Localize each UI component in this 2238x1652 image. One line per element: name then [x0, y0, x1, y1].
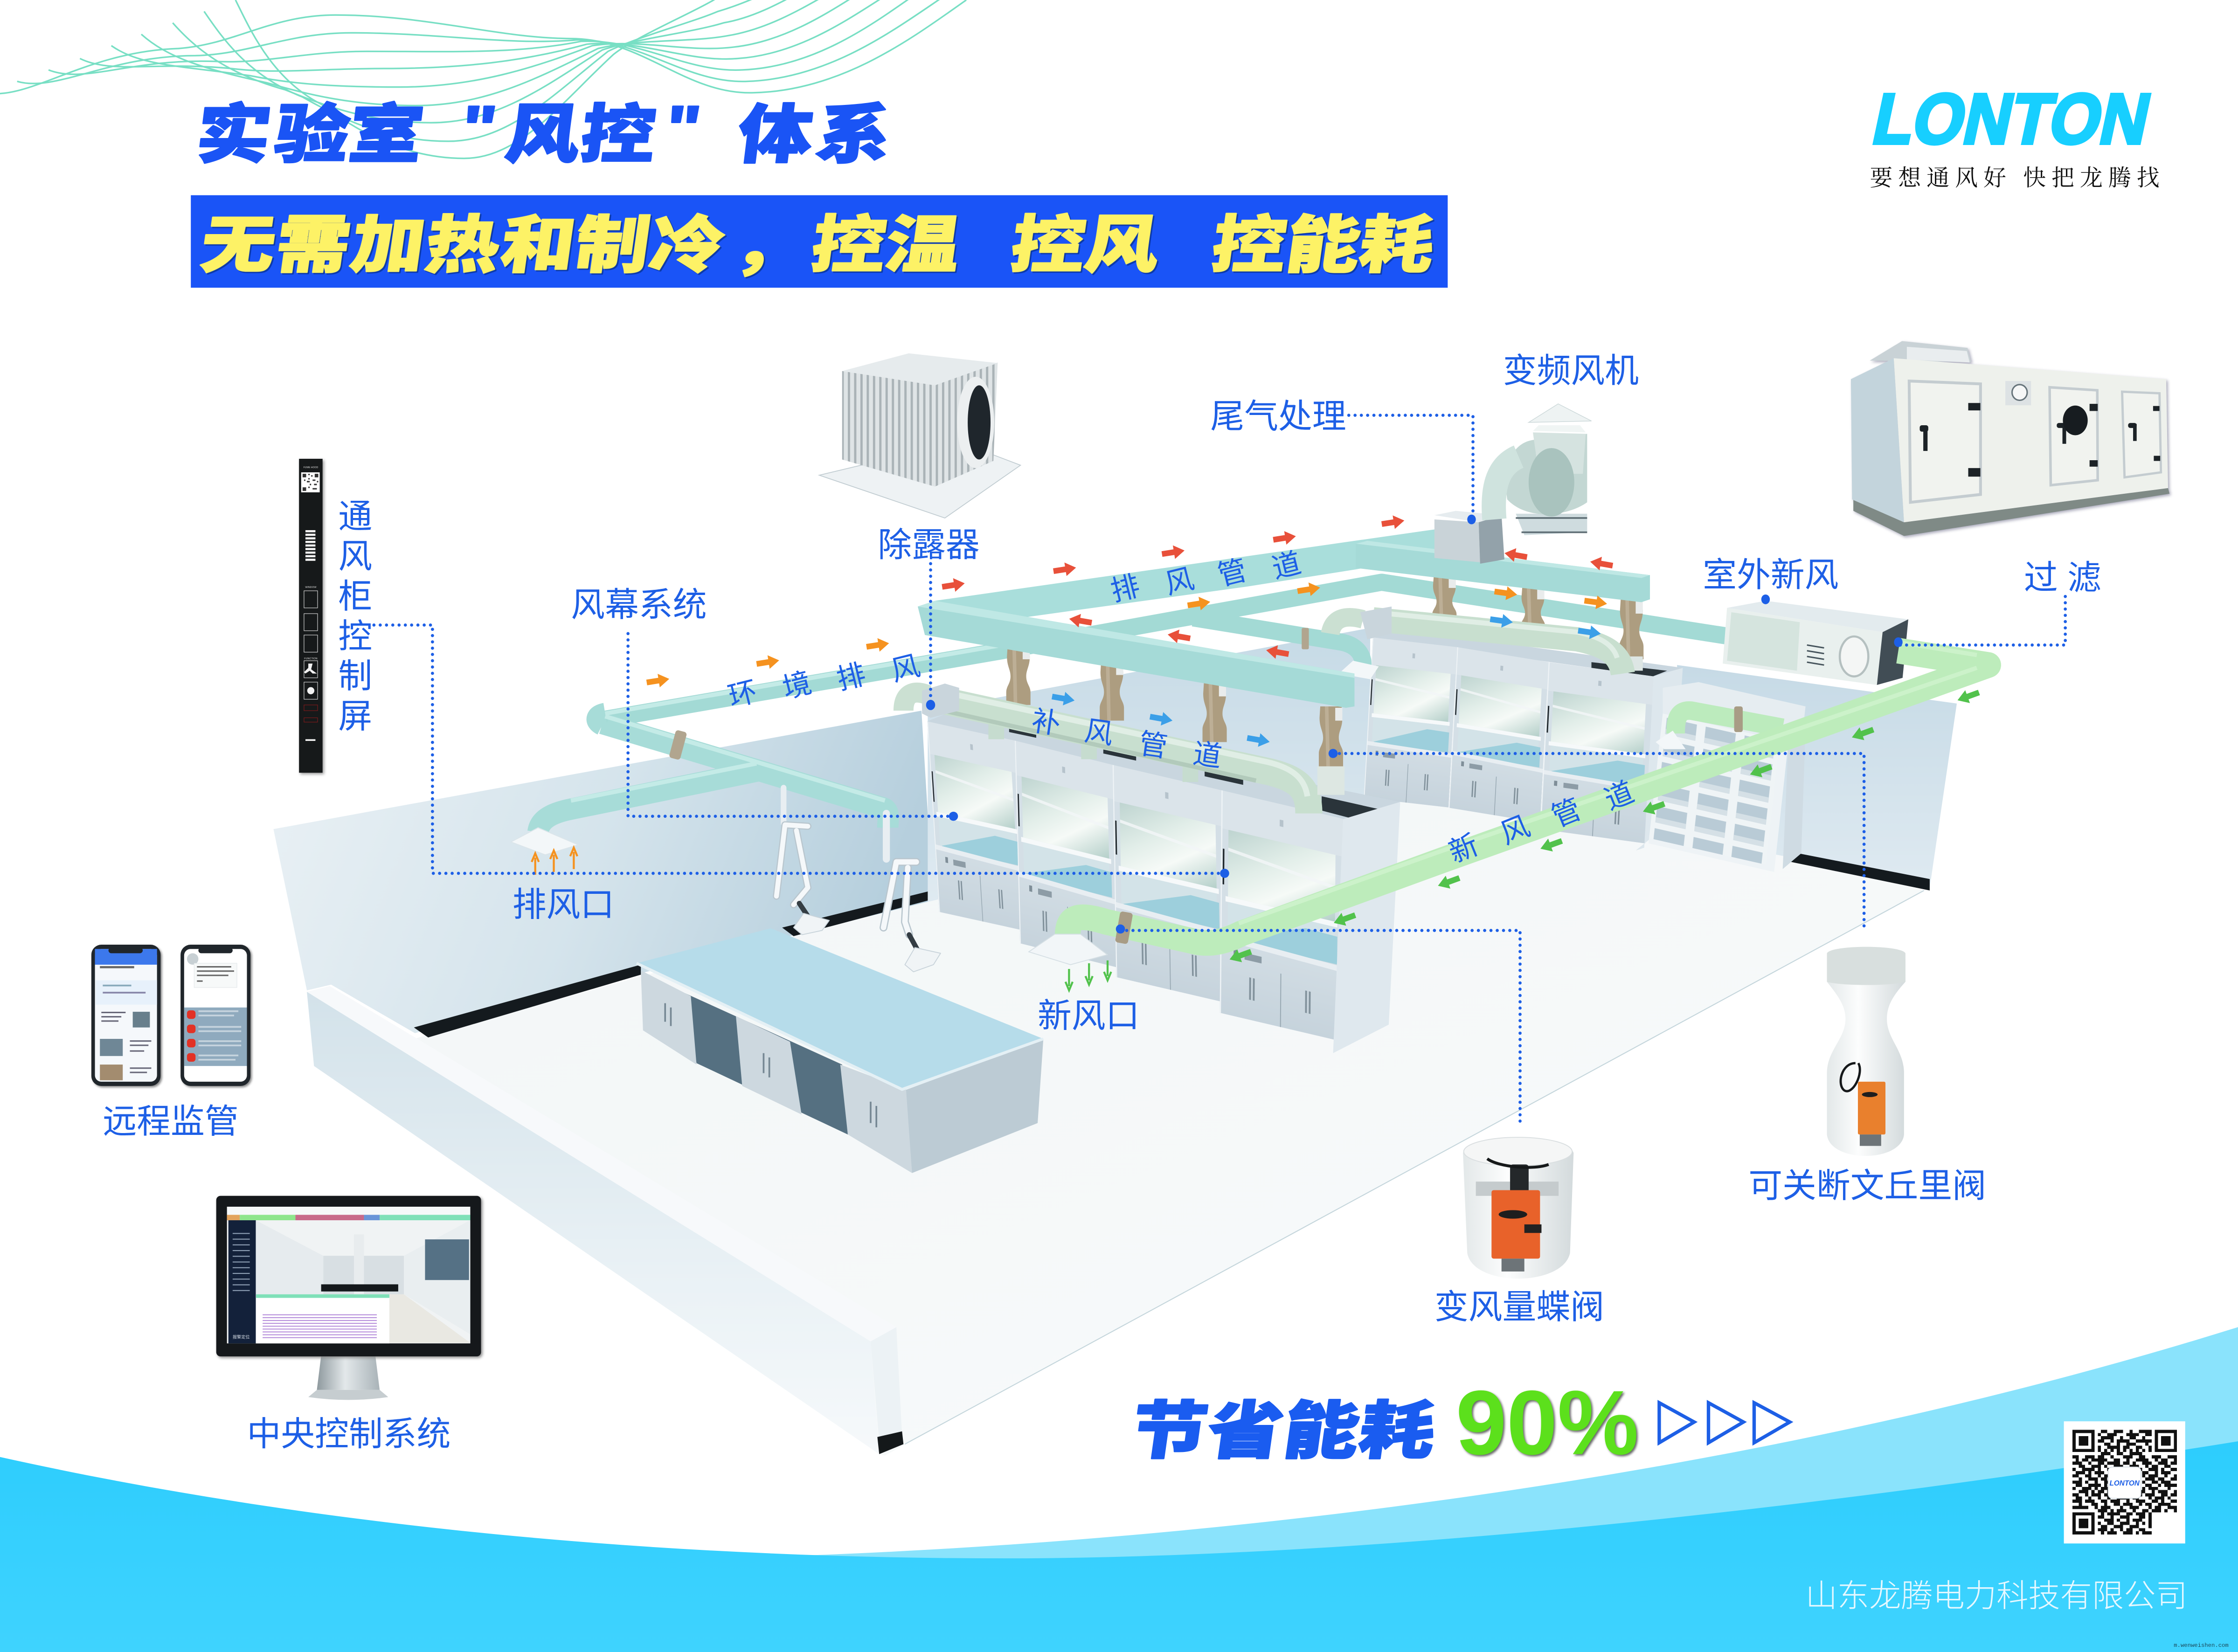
pipe labels — [725, 547, 1638, 869]
label: supply air duct: 管 — [1137, 727, 1170, 763]
triple arrows — [1659, 1403, 1790, 1443]
arm 2 — [884, 862, 916, 935]
unit louver panel — [1727, 612, 1800, 670]
valve cylinder — [1463, 1137, 1573, 1279]
title: 实验室"风控"体系 — [193, 93, 896, 171]
bottom blue wave background — [0, 1327, 2238, 1652]
QR dark dots — [303, 474, 319, 491]
label: fresh air duct: 道 — [1600, 776, 1638, 816]
right beam duct — [1356, 541, 1650, 602]
lab room scene — [273, 628, 1957, 1456]
AHU fan window — [2063, 406, 2088, 435]
central control monitor — [216, 1196, 481, 1400]
label: fresh air duct: 风 — [1496, 810, 1534, 850]
panel caption: FUME HOOD — [304, 466, 319, 469]
label: environment exhaust — [725, 650, 923, 713]
QR background — [2064, 1421, 2185, 1543]
label: environment exhaust: 风 — [888, 650, 923, 687]
phone 1 — [91, 945, 160, 1086]
subtitle banner — [191, 195, 1448, 288]
AHU right door — [2122, 392, 2161, 477]
slogan text: 节省能耗 — [1127, 1396, 1440, 1466]
fresh air duct — [1067, 642, 1988, 944]
decorative wave lines — [0, 0, 966, 159]
screen info overlay — [425, 1239, 469, 1280]
label: fresh air duct — [1444, 776, 1638, 869]
fan stand — [1516, 514, 1587, 535]
left hood side panel — [1333, 802, 1400, 1053]
duct left stub — [903, 692, 928, 711]
label: tail gas: 尾气处理 — [1210, 398, 1346, 435]
label: butterfly valve: 变风量蝶阀 — [1434, 1288, 1604, 1326]
label: fresh air duct: 新 — [1444, 829, 1483, 869]
pipe branches to exhaust vents — [538, 713, 888, 832]
label: air curtain: 风幕系统 — [571, 586, 707, 624]
banner background — [191, 195, 1448, 288]
label: fume hood control screen: 通 — [338, 498, 372, 535]
bench handles — [665, 1003, 876, 1127]
left supply air duct — [903, 692, 1309, 813]
company name: 山东龙腾电力科技有限公司 — [1806, 1578, 2188, 1614]
bench top edge — [637, 963, 1043, 1089]
monitor bezel — [216, 1196, 481, 1356]
AHU base — [1853, 488, 2169, 536]
cabinet top cap — [1663, 682, 1806, 748]
duct stubs into hoods — [996, 713, 1191, 782]
AHU middle door — [2050, 387, 2098, 485]
fan scroll face — [1529, 448, 1574, 517]
right supply air duct — [1330, 612, 1623, 674]
exhaust duct network — [918, 529, 1650, 708]
demister round port — [957, 377, 994, 468]
floor — [343, 794, 1924, 1456]
left hood units — [927, 721, 1027, 931]
unit vent slits — [1807, 645, 1824, 665]
fresh air vent — [1029, 934, 1107, 965]
label: exhaust vent: 排风口 — [513, 886, 614, 924]
orange environment arrows — [645, 581, 1608, 689]
actuator tab — [1524, 1224, 1541, 1233]
green down arrows — [1066, 961, 1111, 990]
unit top — [1727, 601, 1908, 632]
label: supply air duct: 补 — [1030, 705, 1062, 740]
fan and light icons — [304, 664, 317, 741]
left back wall — [273, 711, 933, 1033]
phone 2 — [180, 945, 250, 1086]
label: fume hood control screen: 制 — [338, 657, 372, 695]
environment exhaust pipe — [538, 582, 1730, 832]
screen lab view — [256, 1220, 470, 1343]
AHU left door — [1909, 381, 1981, 502]
arm 2 head — [909, 935, 918, 950]
duct highlight — [1373, 612, 1617, 658]
label: exhaust duct: 管 — [1214, 554, 1250, 592]
label: remote monitoring: 远程监管 — [103, 1103, 239, 1141]
front low wall — [307, 986, 903, 1454]
branch coupling — [1734, 706, 1743, 732]
flow arrows — [532, 514, 1982, 990]
bench cabinet 1 — [641, 970, 697, 1064]
venturi clamp — [1860, 1134, 1881, 1146]
left wall baseboard — [414, 891, 934, 1037]
right back wall — [1677, 665, 1957, 888]
variable frequency fan — [1434, 404, 1592, 564]
middle back wall — [928, 628, 1370, 902]
blue supply arrows — [1051, 612, 1602, 749]
glass storage cabinet — [1649, 682, 1806, 872]
demister port opening — [968, 385, 991, 459]
logo wordmark: LONTON — [1866, 79, 2157, 159]
monitor stand base — [308, 1390, 388, 1400]
QR code — [2064, 1421, 2185, 1543]
air handling unit product — [1851, 341, 2169, 536]
right branch coupling — [1302, 628, 1309, 650]
label: venturi valve: 可关断文丘里阀 — [1748, 1167, 1986, 1205]
actuator slot — [1499, 1210, 1527, 1219]
QR center logo — [2108, 1467, 2141, 1499]
cabinet grid face — [1649, 713, 1788, 872]
red exhaust arrows — [941, 514, 1614, 661]
label: exhaust duct: 排 — [1108, 570, 1143, 607]
branch to storage vent — [1676, 711, 1783, 733]
main fresh air duct — [1067, 651, 1988, 943]
dotted callout lines — [374, 415, 2065, 1127]
unit fan circle — [1840, 636, 1868, 677]
arm 2 pole — [885, 813, 887, 859]
arm 2 shadow — [884, 862, 916, 935]
control panel QR — [301, 472, 320, 492]
label: fume hood control screen: 屏 — [338, 698, 372, 735]
label: inverter fan: 变频风机 — [1503, 352, 1639, 390]
screen sidebar — [229, 1220, 256, 1343]
central lab bench — [637, 928, 1043, 1173]
label: exhaust duct — [1108, 547, 1304, 607]
label: exhaust duct: 风 — [1162, 562, 1197, 600]
fan outlet rim — [1533, 425, 1586, 432]
orange up arrows — [532, 848, 577, 875]
bench top — [637, 928, 1043, 1089]
left fume hood row — [927, 711, 1400, 1053]
label: supply air duct — [1030, 705, 1224, 773]
logo — [1866, 79, 2160, 191]
AHU handles — [1919, 423, 2137, 451]
venturi valve product — [1827, 947, 1905, 1156]
right hoods top tray — [1372, 628, 1683, 677]
back horizontal duct — [935, 529, 1467, 618]
light wave — [714, 1327, 2238, 1652]
unit front — [1723, 608, 1883, 685]
pipe coupling — [669, 730, 687, 760]
sidebar text: 报警定位 — [233, 1334, 250, 1340]
AHU gauge — [2012, 385, 2027, 400]
bench knee space — [685, 993, 848, 1134]
damper louvers — [1907, 347, 1970, 362]
fan rain cap — [1529, 404, 1592, 422]
AHU front — [1894, 358, 2168, 522]
fume extraction arms — [776, 788, 941, 972]
actuator top — [1510, 1164, 1529, 1196]
duct body — [1373, 619, 1623, 674]
pipe body — [605, 582, 1730, 719]
label: outdoor fresh air: 室外新风 — [1703, 556, 1839, 594]
demister left face — [842, 371, 935, 487]
AHU left side — [1851, 358, 1904, 522]
venturi actuator — [1858, 1082, 1885, 1134]
bench cabinet 3 — [840, 1064, 912, 1173]
bench right side — [905, 1039, 1043, 1173]
left beam duct — [918, 601, 1354, 708]
roof damper — [1870, 341, 1971, 362]
panel button frames — [304, 591, 318, 699]
fume hood control screen — [299, 459, 323, 773]
venturi flange — [1827, 947, 1905, 985]
function label: FUNCTION — [304, 657, 318, 660]
fan stand bars — [1516, 518, 1587, 532]
table header — [256, 1294, 389, 1298]
duct lower shade — [943, 711, 1256, 781]
venturi actuator slot — [1862, 1092, 1878, 1097]
level bars — [305, 530, 315, 561]
right hood dark gap — [1592, 662, 1667, 677]
label: fresh air vent: 新风口 — [1038, 997, 1140, 1035]
exhaust vent hood — [511, 828, 578, 855]
label: filter: 过 滤 — [2024, 559, 2101, 597]
left hood dark gaps — [1009, 728, 1379, 818]
phones — [91, 945, 250, 1086]
monitor stand — [317, 1355, 380, 1390]
label: central control: 中央控制系统 — [247, 1415, 450, 1453]
butterfly valve product — [1463, 1137, 1573, 1279]
venturi cable — [1841, 1063, 1860, 1091]
right wall baseboard — [1784, 850, 1930, 891]
fan transition box — [1434, 511, 1504, 564]
QR modules — [2072, 1431, 2177, 1533]
arm 1 head — [799, 903, 808, 916]
demister right face — [935, 362, 998, 487]
venturi body — [1827, 949, 1905, 1156]
label: fume hood control screen: 柜 — [338, 578, 372, 615]
brown connectors left row — [1006, 645, 1227, 742]
pipe highlight — [571, 645, 1002, 801]
cabinet right side — [1783, 728, 1806, 869]
label: exhaust duct: 道 — [1269, 547, 1304, 584]
duct left stub — [1330, 617, 1363, 634]
right fume hood row — [1364, 628, 1683, 850]
data table panel — [256, 1295, 389, 1343]
duct body — [943, 701, 1309, 813]
label: fresh air duct: 管 — [1547, 793, 1586, 833]
valve top opening — [1464, 1137, 1572, 1166]
screen top colored bars — [227, 1215, 470, 1220]
green fresh air arrows — [1227, 686, 1982, 966]
fan scroll — [1506, 434, 1587, 514]
slogan percent: 90% — [1456, 1372, 1639, 1474]
right hood side panel — [1635, 668, 1683, 850]
brown connectors right row — [1432, 576, 1643, 670]
table rows — [263, 1314, 377, 1338]
label: environment exhaust: 环 — [725, 675, 760, 713]
demister top — [842, 353, 998, 385]
unit side — [1877, 619, 1908, 685]
right hood units — [1364, 637, 1457, 808]
window label: WINDOW — [305, 586, 317, 589]
label: supply air duct: 风 — [1082, 715, 1116, 750]
storage vent — [1656, 731, 1686, 749]
bench cabinet 2 — [736, 1016, 802, 1114]
QR logo text: LONTON — [2110, 1479, 2140, 1487]
energy saving slogan — [1127, 1372, 1790, 1474]
right beam top — [1356, 541, 1650, 578]
label: supply air duct: 道 — [1191, 738, 1224, 773]
supply duct junction box — [922, 684, 959, 718]
main wave — [0, 1441, 2238, 1652]
actuator cable — [1487, 1159, 1549, 1168]
control panel body — [299, 459, 323, 773]
AHU gauge bracket — [2005, 381, 2031, 405]
label: fume hood control screen: 控 — [338, 617, 372, 655]
demister product — [819, 353, 1020, 518]
arm 1 shadow — [776, 825, 808, 905]
label: fume hood control screen: 风 — [338, 538, 372, 575]
left beam top — [918, 601, 1354, 678]
banner text: 无需加热和制冷，控温控风控能耗 — [196, 211, 1439, 280]
label: demister: 除露器 — [878, 526, 980, 564]
sidebar rows — [233, 1233, 250, 1291]
fan inlet elbow — [1494, 456, 1518, 519]
demister base — [819, 454, 1020, 518]
monitor screen — [227, 1207, 470, 1343]
AHU hinges — [1968, 403, 2160, 477]
arm 1 — [776, 825, 808, 905]
right room vent — [1339, 661, 1379, 679]
floor edge line — [905, 891, 1924, 1444]
last left connector — [1317, 706, 1344, 795]
arm 1 pole — [783, 788, 784, 823]
outdoor fresh air unit — [1723, 601, 1908, 685]
actuator body — [1491, 1190, 1540, 1258]
label: environment exhaust: 排 — [833, 658, 869, 696]
logo tagline: 要想通风好 快把龙腾找 — [1870, 165, 2160, 191]
actuator clamp — [1502, 1258, 1524, 1272]
red buttons — [304, 705, 318, 722]
left hoods top tray — [927, 711, 1400, 819]
fresh duct coupling — [1115, 911, 1133, 944]
fan outlet — [1533, 432, 1586, 474]
duct highlight — [943, 692, 1307, 796]
right duct junction box — [1360, 607, 1392, 639]
valve bracket — [1476, 1182, 1559, 1196]
watermark: m.wenweishen.com — [2174, 1642, 2229, 1649]
fresh duct highlight — [1239, 642, 1977, 923]
label: environment exhaust: 境 — [779, 667, 815, 704]
